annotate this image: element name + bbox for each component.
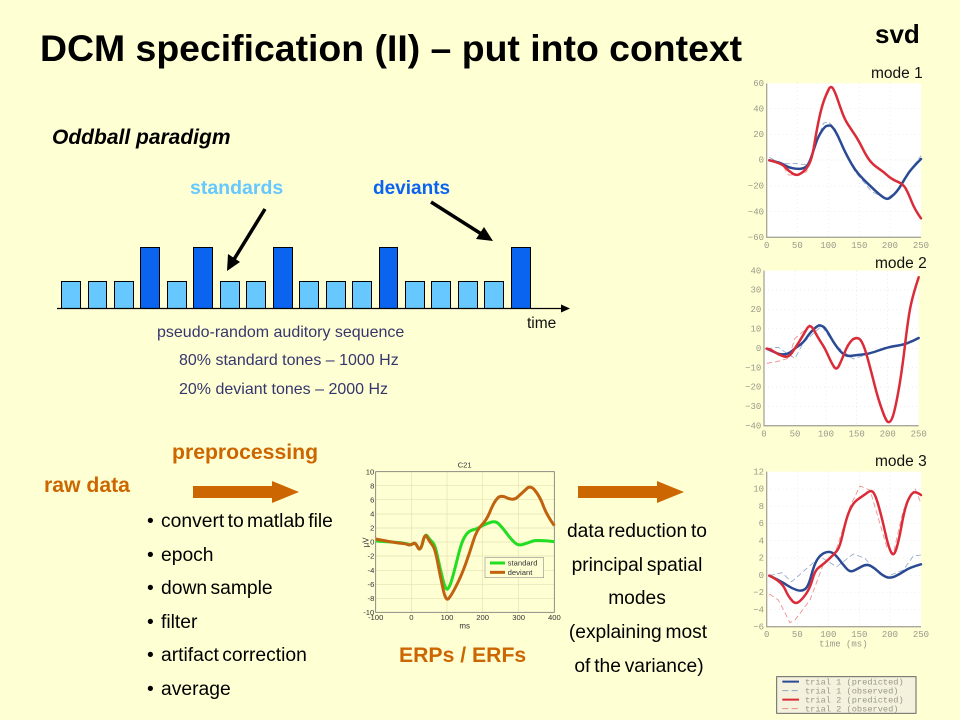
chart: ERP: -2 <box>368 552 374 561</box>
heading: svd: svd <box>875 19 920 49</box>
preprocessing steps list: average <box>161 679 231 700</box>
chart: ERP: 100 <box>441 613 453 622</box>
chart: mode 1: 200 <box>882 241 898 251</box>
preprocessing steps list: artifact correction <box>161 645 307 666</box>
chart: mode 2: 0 <box>756 344 761 354</box>
preprocessing steps list: • <box>147 612 154 633</box>
tone sequence bars <box>62 248 530 308</box>
chart: ERP: -100 <box>368 613 383 622</box>
preprocessing steps list: down sample <box>161 578 273 599</box>
legend: trial 1 (observed) <box>805 687 899 697</box>
chart: mode 3: 200 <box>882 630 898 640</box>
data reduction text <box>567 521 708 677</box>
chart: ERP: -8 <box>368 594 374 603</box>
chart: mode 1: 40 <box>753 104 764 114</box>
label: mode 3: mode 3 <box>875 453 927 470</box>
chart: ERP: µV <box>362 537 371 547</box>
chart: ERP: 0 <box>370 538 374 547</box>
chart: mode 2: 20 <box>751 305 761 315</box>
chart: mode 3: −4 <box>753 605 764 615</box>
chart: ERP: standard <box>508 559 537 568</box>
chart: mode 1: 250 <box>913 241 929 251</box>
chart: mode 3: 10 <box>753 485 764 495</box>
label: deviants: deviants <box>373 178 450 199</box>
label: ERPs / ERFs: ERPs / ERFs <box>399 644 526 667</box>
chart: mode 3: 0 <box>764 630 769 640</box>
label: time: time <box>527 315 556 332</box>
chart: mode 1: −40 <box>748 207 764 217</box>
chart: mode 3: 6 <box>759 519 764 529</box>
chart: mode 2: −20 <box>745 383 761 393</box>
chart: ERP: -6 <box>368 580 374 589</box>
preprocessing steps list: • <box>147 545 154 566</box>
chart: mode 2: 200 <box>880 430 896 440</box>
chart: mode 3: 4 <box>759 536 764 546</box>
chart: mode 1: −60 <box>748 233 764 243</box>
chart: mode 2: 250 <box>911 430 927 440</box>
label: mode 2: mode 2 <box>875 255 927 272</box>
chart: ERP: 200 <box>476 613 489 622</box>
chart: mode 3: 8 <box>759 502 764 512</box>
chart: ERP: 2 <box>370 524 374 533</box>
chart: mode 2: 30 <box>751 286 761 296</box>
chart: mode 1: 20 <box>753 130 764 140</box>
preprocessing steps list: filter <box>161 612 198 633</box>
arrow: deviants <box>431 202 493 241</box>
chart: mode 3 <box>753 467 929 650</box>
chart: mode 1: 60 <box>753 79 764 89</box>
chart: mode 3: 12 <box>753 467 764 477</box>
chart: mode 1: 0 <box>759 156 764 166</box>
chart: mode 2: 100 <box>818 430 834 440</box>
sequence description: 80% standard tones – 1000 Hz <box>179 352 399 369</box>
data reduction text: of the variance) <box>574 656 704 677</box>
preprocessing steps list: • <box>147 679 154 700</box>
chart: mode 3: 100 <box>820 630 836 640</box>
preprocessing steps list: • <box>147 645 154 666</box>
sequence description: pseudo-random auditory sequence <box>157 324 404 341</box>
chart: ERP: deviant <box>508 568 533 577</box>
chart: mode 1: 100 <box>820 241 836 251</box>
chart: ERP: 10 <box>366 467 374 476</box>
chart: ERP: ms <box>459 621 470 630</box>
sequence description <box>157 324 404 398</box>
chart: mode 3: 0 <box>759 571 764 581</box>
chart: ERP: C21 <box>458 460 472 469</box>
chart: mode 2: 150 <box>849 430 865 440</box>
legend: trial 2 (predicted) <box>805 696 904 706</box>
chart: mode 1 <box>748 79 929 251</box>
label: standards: standards <box>190 177 283 199</box>
heading: Oddball paradigm: Oddball paradigm <box>52 126 231 149</box>
chart: mode 1: 0 <box>764 241 769 251</box>
preprocessing steps list <box>147 511 333 700</box>
chart: mode 1: 50 <box>792 241 803 251</box>
label: mode 1: mode 1 <box>871 65 923 82</box>
chart: mode 2: 0 <box>761 430 767 440</box>
preprocessing steps list: epoch <box>161 545 214 566</box>
chart: mode 2: 10 <box>751 324 761 334</box>
label: raw data: raw data <box>44 474 130 497</box>
chart: mode 3: time (ms) <box>819 640 868 650</box>
chart: ERP: 400 <box>548 613 561 622</box>
chart: ERP: -10 <box>363 608 374 617</box>
chart: mode 1: 150 <box>851 241 867 251</box>
sequence description: 20% deviant tones – 2000 Hz <box>179 381 388 398</box>
chart: mode 2 <box>745 266 927 440</box>
chart: ERP: 4 <box>370 510 375 519</box>
chart: mode 2: 40 <box>751 266 761 276</box>
chart: ERP <box>362 460 561 630</box>
chart: mode 2: 50 <box>790 430 800 440</box>
data reduction text: data reduction to <box>567 521 707 542</box>
preprocessing steps list: • <box>147 511 154 532</box>
legend: trial 2 (observed) <box>805 705 899 715</box>
chart: mode 3: −6 <box>753 622 764 632</box>
label: preprocessing: preprocessing <box>172 441 318 464</box>
chart: ERP: -4 <box>368 566 375 575</box>
legend <box>777 677 916 715</box>
arrow: data reduction <box>578 481 684 503</box>
chart: mode 2: −30 <box>745 402 761 412</box>
chart: mode 3: 2 <box>759 554 764 564</box>
data reduction text: (explaining most <box>569 622 708 643</box>
chart: mode 3: 150 <box>851 630 867 640</box>
legend: trial 1 (predicted) <box>805 678 904 688</box>
chart: mode 3: 50 <box>792 630 803 640</box>
data reduction text: modes <box>608 588 666 609</box>
preprocessing steps list: convert to matlab file <box>161 511 333 532</box>
chart: mode 2: −40 <box>745 421 761 431</box>
chart: ERP: 6 <box>370 495 374 504</box>
arrow: standards <box>227 209 265 271</box>
chart: mode 3: 250 <box>913 630 929 640</box>
arrow: preprocessing <box>193 481 299 503</box>
chart: mode 3: −2 <box>753 588 764 598</box>
chart: mode 1: −20 <box>748 182 764 192</box>
chart: ERP: 300 <box>512 613 525 622</box>
chart: ERP: 0 <box>409 613 413 622</box>
data reduction text: principal spatial <box>572 555 702 576</box>
time axis <box>57 304 570 312</box>
title: DCM specification (II) – put into context <box>40 27 742 69</box>
chart: mode 2: −10 <box>745 363 761 373</box>
preprocessing steps list: • <box>147 578 154 599</box>
chart: ERP: 8 <box>370 481 374 490</box>
